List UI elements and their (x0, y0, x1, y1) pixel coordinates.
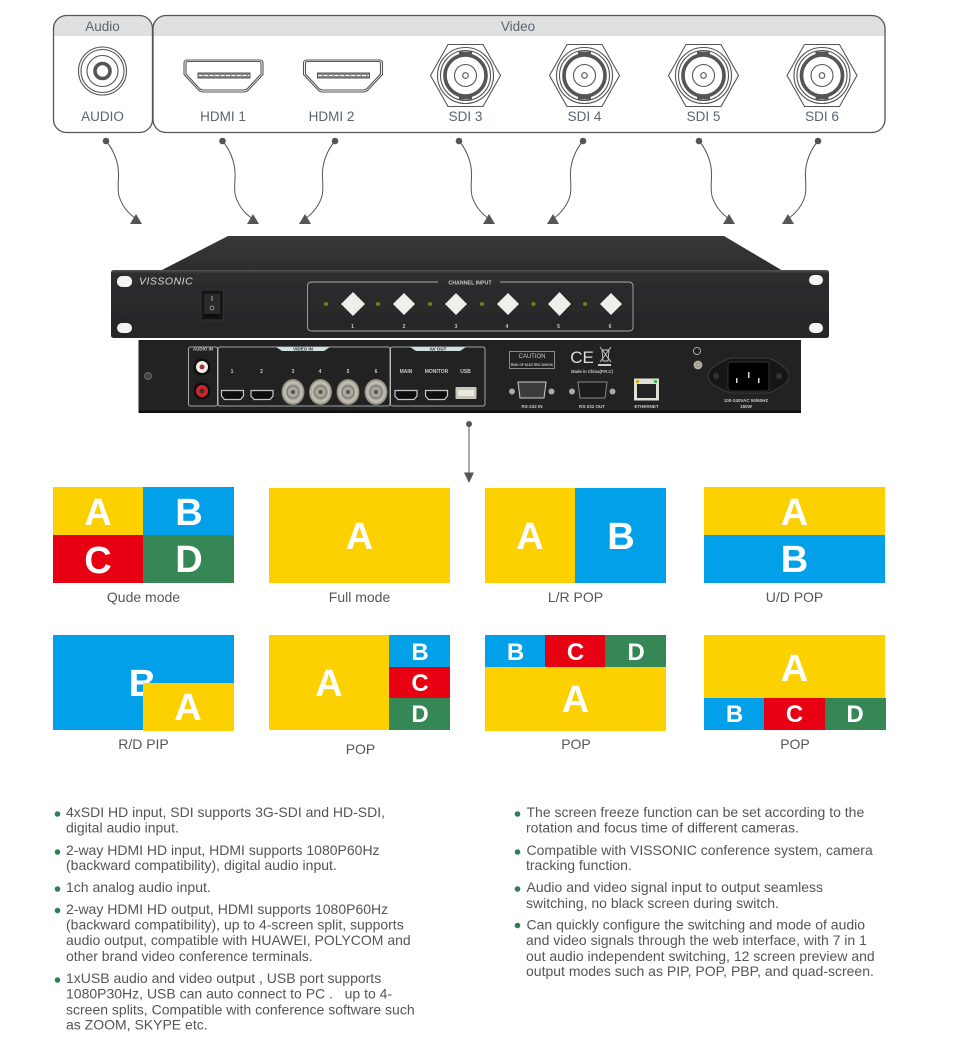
mode: pop bottom row: B (726, 701, 743, 728)
icon: sdi 6 (787, 44, 857, 106)
caution label (510, 352, 554, 368)
mode: up down pop: A (781, 492, 808, 534)
icon: hdmi 2 (304, 60, 382, 92)
video in ports: 1 (231, 369, 234, 375)
feature list: right column (515, 804, 875, 979)
channel input panel: 2 (403, 324, 406, 330)
caution label: RISK OF ELECTRIC SHOCK (511, 363, 554, 367)
mounting holes (117, 275, 823, 333)
mode: pop top row (485, 635, 666, 752)
feature list: left column: (backward compatibility), up to 4-screen split, supports (66, 916, 404, 932)
icon: audio jack (78, 47, 126, 95)
compliance marks: CE (570, 348, 594, 367)
video in ports: 3 (292, 369, 295, 375)
feature list: left column: 4xSDI HD input, SDI supports 3G-SDI and HD-SDI, (66, 804, 385, 820)
mode: pop bottom row: A (781, 648, 808, 690)
power inlet: 150W (740, 404, 753, 409)
icon: sdi 3 (430, 44, 500, 106)
ground screw (694, 348, 702, 370)
mode: picture in picture: A (174, 687, 202, 729)
mode: quad (53, 487, 234, 605)
label: sdi 3: SDI 3 (449, 109, 482, 124)
feature list: left column: 1xUSB audio and video output , USB port supports (66, 970, 381, 986)
feature list: left column: (backward compatibility), digital audio input. (66, 857, 337, 873)
audio jacks (194, 358, 210, 400)
channel input panel (308, 280, 633, 331)
mode: pop top row: B (507, 639, 524, 666)
rs-232 ports: RS-232 OUT (579, 404, 605, 409)
rs-232 ports: RS-232 IN (521, 404, 543, 409)
mode: quad: A (84, 492, 112, 534)
label: sdi 5: SDI 5 (687, 109, 720, 124)
video in ports: 4 (319, 369, 322, 375)
feature list: right column: The screen freeze function can be set according to the (526, 804, 864, 820)
feature list: left column: 2-way HDMI HD output, HDMI supports 1080P60Hz (66, 901, 388, 917)
feature list: right column: Audio and video signal input to output seamless (526, 879, 823, 895)
feature list: right column: Can quickly configure the switching and mode of audio (526, 916, 865, 932)
feature list: right column: rotation and focus time of different cameras. (526, 820, 799, 836)
mode: full (269, 488, 450, 605)
device: rear panel: VIDEO IN (293, 346, 313, 352)
power inlet (708, 358, 789, 409)
mode: left right pop: B (607, 516, 635, 558)
arrow: audio to device (103, 138, 142, 224)
arrow: hdmi 1 to device (219, 138, 259, 224)
device: front panel (111, 236, 829, 338)
mode: pop right column: D (411, 701, 429, 728)
mode: quad: D (175, 539, 203, 581)
arrow: sdi 4 to device (547, 138, 586, 224)
mode: pop right column: B (411, 639, 429, 666)
mode: left right pop: A (516, 516, 544, 558)
feature list: left column: 1ch analog audio input. (66, 879, 211, 895)
mode: picture in picture: B (129, 663, 156, 705)
compliance marks: Made in China(P.R.C) (571, 369, 614, 374)
label: sdi 6: SDI 6 (805, 109, 839, 124)
feature list: left column: digital audio input. (66, 820, 179, 836)
rs-232 ports (509, 382, 616, 409)
feature list: right column: tracking function. (526, 857, 632, 873)
label: POP (346, 741, 375, 757)
feature list: left column (55, 804, 415, 1032)
channel input panel: 5 (557, 324, 560, 330)
arrow: device to output modes (464, 421, 474, 483)
caution label: CAUTION (518, 354, 546, 360)
video in ports: 6 (375, 369, 378, 375)
feature list: right column: switching, no black screen during switch. (526, 895, 779, 911)
arrow: sdi 6 to device (782, 138, 821, 224)
heading: audio: Audio (85, 19, 120, 34)
mode: pop bottom row: D (846, 701, 864, 728)
channel input panel: 6 (609, 324, 612, 330)
mode: pop bottom row: C (786, 701, 803, 728)
brand: VISSONIC (139, 276, 193, 288)
label: R/D PIP (118, 736, 169, 752)
feature list: left column: 1080P30Hz, USB can auto connect to PC . up to 4- (66, 986, 392, 1002)
mode: quad: B (175, 492, 203, 534)
arrow: sdi 5 to device (696, 138, 735, 224)
av out ports: MAIN (400, 369, 413, 375)
feature list: right column: output modes such as PIP, POP, PBP, and quad-screen. (526, 963, 874, 979)
label: sdi 4: SDI 4 (568, 109, 602, 124)
arrow: hdmi 2 to device (299, 138, 338, 224)
ethernet port: ETHERNET (634, 404, 659, 409)
mode: left right pop (485, 488, 666, 605)
mode: pop top row: D (627, 639, 645, 666)
ethernet port (634, 378, 659, 409)
heading: video: Video (501, 19, 535, 34)
mode: full: A (346, 516, 373, 558)
label: L/R POP (548, 589, 603, 605)
av out ports: USB (460, 369, 471, 375)
icon: hdmi 1 (184, 60, 263, 92)
label: hdmi 2: HDMI 2 (309, 109, 354, 124)
label: POP (561, 736, 591, 752)
device: rear panel: AV OUT (430, 346, 447, 352)
mode: pop top row: A (562, 679, 589, 721)
channel input panel: CHANNEL INPUT (448, 280, 492, 286)
label: Qude mode (107, 589, 180, 605)
feature list: left column: audio output, compatible with HUAWEI, POLYCOM and (66, 932, 411, 948)
channel input panel: 1 (351, 324, 354, 330)
feature list: left column: other brand video conference terminals. (66, 948, 313, 964)
feature list: right column: out audio independent switching, 12 screen preview and (526, 948, 875, 964)
av out ports (395, 369, 476, 400)
arrow: sdi 3 to device (456, 138, 495, 224)
power inlet: 100-240VAC 50/60HZ (724, 398, 768, 403)
mode: pop right column: C (411, 670, 429, 697)
feature list: left column: screen splits, Compatible with conference software such (66, 1002, 415, 1018)
device: rear panel: AUDIO IN (193, 346, 213, 352)
label: audio: AUDIO (81, 109, 124, 124)
icon: sdi 5 (668, 44, 738, 106)
device: rear panel (138, 340, 801, 413)
section frames (188, 347, 485, 406)
label: POP (780, 736, 810, 752)
feature list: right column: and video signals through the web interface, with 7 in 1 (526, 932, 867, 948)
feature list: right column: Compatible with VISSONIC conference system, camera (526, 842, 873, 858)
mode: picture in picture (53, 635, 234, 752)
channel input panel: 3 (455, 324, 458, 330)
label: Full mode (329, 589, 390, 605)
video in ports: 2 (260, 369, 263, 375)
compliance marks (570, 347, 614, 374)
feature list: left column: 2-way HDMI HD input, HDMI supports 1080P60Hz (66, 842, 380, 858)
label: U/D POP (766, 589, 823, 605)
power switch (201, 290, 224, 320)
mode: up down pop: B (781, 539, 808, 581)
mode: pop top row: C (567, 639, 584, 666)
mode: pop right column (269, 635, 450, 757)
mode: pop bottom row (704, 635, 886, 752)
icon: sdi 4 (550, 44, 620, 106)
video in ports (222, 369, 388, 405)
panel: audio input (54, 16, 152, 132)
feature list: left column: as ZOOM, SKYPE etc. (66, 1016, 208, 1032)
label: hdmi 1: HDMI 1 (200, 109, 246, 124)
channel input panel: 4 (506, 324, 509, 330)
video in ports: 5 (347, 369, 350, 375)
mode: quad: C (84, 540, 112, 582)
av out ports: MONITOR (425, 369, 449, 375)
panel: video inputs (153, 16, 885, 132)
mode: pop right column: A (315, 663, 343, 705)
mode: up down pop (704, 487, 885, 605)
